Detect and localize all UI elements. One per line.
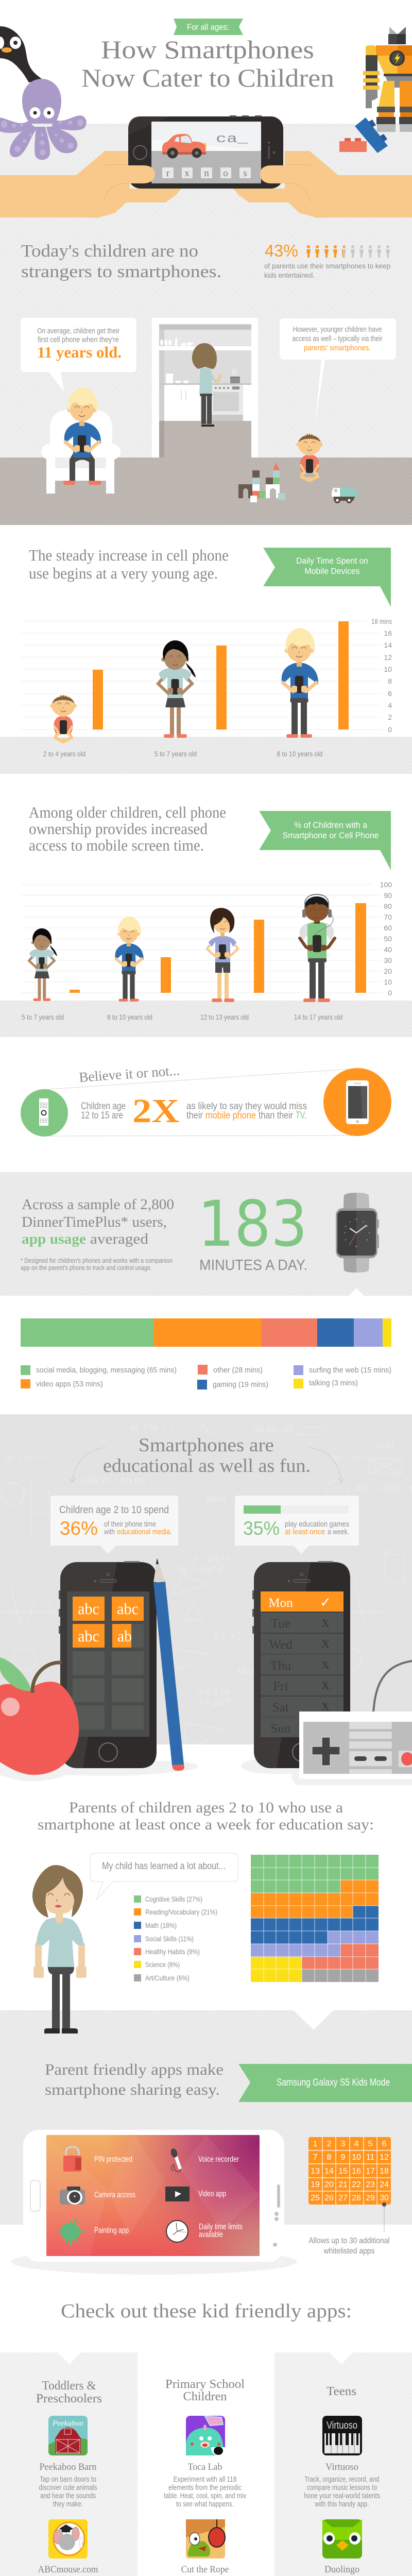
ribbon: daily time: Mobile Devices xyxy=(305,566,359,576)
letter tiles: abc xyxy=(78,1600,99,1618)
legend: learned skills: Healthy Habits (9%) xyxy=(145,1947,200,1956)
white notch under watch xyxy=(349,1288,364,1296)
ribbon: percent of children: % of Children with a xyxy=(294,820,368,830)
day list: Tue xyxy=(271,1617,290,1631)
feature labels: Painting app xyxy=(94,2226,129,2235)
app grid: 30 whitelisted apps: 14 xyxy=(324,2167,334,2176)
chalkboard formulas: S = π/2 xyxy=(214,1630,241,1640)
bar chart: phone ownership: 100 xyxy=(380,880,392,889)
legend: learned skills: Social Skills (11%) xyxy=(145,1935,194,1943)
background: hero dotted band xyxy=(0,124,412,460)
legend: learned skills: Science (8%) xyxy=(145,1960,180,1969)
heading: educational as well as fun: educational as well as fun. xyxy=(103,1455,311,1477)
icon: wall clock xyxy=(166,2221,188,2242)
speech bubble: parents' smartphones: However, younger children have xyxy=(293,326,382,334)
bar chart: daily time spent: 10 xyxy=(384,665,392,673)
app grid: 30 whitelisted apps: 25 xyxy=(311,2194,320,2202)
tween girl xyxy=(207,908,238,1002)
ribbon: percent of children xyxy=(259,811,391,870)
day list: Sun xyxy=(271,1722,291,1736)
letter tiles: abc xyxy=(78,1627,99,1645)
bar chart: phone ownership: 0 xyxy=(388,989,392,997)
callout: believe it or not: their xyxy=(186,1110,203,1121)
legend: app usage: other (28 mins) xyxy=(213,1366,263,1375)
panel: teens: with this handy app. xyxy=(315,2500,369,2509)
card: 35 percent: at least once xyxy=(285,1528,325,1536)
panel: toddlers and preschoolers: Toddlers & xyxy=(42,2379,96,2393)
stacked bar: app usage xyxy=(21,1318,391,1347)
speech bubble: my child has learned: My child has learned a lot about... xyxy=(102,1861,226,1872)
letter keys: s xyxy=(243,168,247,179)
card: 36 percent: with xyxy=(104,1528,115,1536)
callout: believe it or not: mobile phone xyxy=(205,1110,256,1121)
callout: believe it or not: as likely to say they would miss xyxy=(186,1101,307,1112)
toy blocks castle xyxy=(238,463,285,502)
background: chalkboard xyxy=(0,1414,412,1744)
icon: toca lab xyxy=(186,2416,225,2455)
speech bubble: first cell phone: On average, children get their xyxy=(37,327,119,335)
bar chart: daily time spent: 18 mins xyxy=(371,617,392,625)
app grid: 30 whitelisted apps: 29 xyxy=(366,2194,375,2202)
bar chart: daily time spent: 0 xyxy=(388,725,392,734)
app grid: 30 whitelisted apps: 13 xyxy=(311,2167,320,2176)
badge: for all ages xyxy=(174,19,243,35)
chalkboard formulas: π ≈ 3,14 xyxy=(198,1687,229,1697)
icon: virtuoso xyxy=(322,2416,362,2455)
bar chart: daily time spent: 6 xyxy=(388,689,392,698)
app grid: 30 whitelisted apps: 19 xyxy=(311,2180,320,2189)
letter keys xyxy=(162,167,251,179)
feature labels: Video app xyxy=(198,2190,226,2198)
heading: older children: ownership provides increased xyxy=(29,820,208,838)
day list: Fri xyxy=(273,1680,288,1693)
heading: parent friendly apps: Parent friendly apps make xyxy=(45,2060,224,2078)
bar chart: phone ownership: 30 xyxy=(384,956,392,964)
letter tiles: ab xyxy=(117,1627,132,1645)
bar chart: daily time spent: 16 xyxy=(384,629,392,637)
bar chart: daily time spent: 2 xyxy=(388,713,392,721)
speech bubble: parents' smartphones: parents' smartphones. xyxy=(304,344,371,352)
feature icons xyxy=(58,2147,190,2246)
word puzzle: ca_ xyxy=(216,132,249,146)
heading: steady increase: use begins at a very young age. xyxy=(29,564,218,582)
speech bubble: first cell phone xyxy=(21,318,136,393)
age labels xyxy=(43,750,322,758)
child figures xyxy=(50,628,318,742)
app screen xyxy=(151,122,261,183)
legend: learned skills: Reading/Vocabulary (21%) xyxy=(145,1908,217,1916)
panel: toddlers and preschoolers: and hear the sounds xyxy=(40,2492,96,2500)
stat: 43 percent of parents xyxy=(264,241,390,279)
band under chart 2 xyxy=(0,1001,412,1037)
arrow: dashed left xyxy=(70,1448,105,1482)
text: app usage averaged: app on the parent's phone to track and control usage. xyxy=(21,1264,152,1272)
day list: X xyxy=(321,1637,330,1650)
day list: Mon xyxy=(268,1596,293,1610)
band under chart 1 xyxy=(0,737,412,774)
legend: app usage: video apps (53 mins) xyxy=(36,1380,103,1388)
legend: app usage: gaming (19 mins) xyxy=(213,1380,268,1389)
stat: 43 percent of parents: of parents use their smartphones to keep xyxy=(264,262,390,270)
app screen xyxy=(46,2135,260,2256)
app grid: 30 whitelisted apps: 21 xyxy=(338,2180,348,2189)
heading: kid friendly apps: Check out these kid friendly apps: xyxy=(61,2300,352,2322)
app grid: 30 whitelisted apps: 4 xyxy=(354,2140,359,2148)
bar chart: daily time spent: 4 xyxy=(388,701,392,709)
callout: additional apps xyxy=(309,2202,389,2256)
speech bubble: my child has learned xyxy=(90,1853,238,1900)
app grid: 30 whitelisted apps: 30 xyxy=(380,2194,389,2202)
tablet: kids mode phone xyxy=(11,2130,297,2275)
panel: primary school children: elements from the periodic xyxy=(168,2484,242,2492)
stat: 43 percent of parents: 43% xyxy=(265,241,298,260)
chalkboard formulas: π ≈ 22/7 xyxy=(198,1697,230,1707)
panel: primary school children: Cut the Rope xyxy=(181,2564,229,2575)
day list: X xyxy=(321,1617,330,1630)
panel: toddlers and preschoolers xyxy=(0,2352,138,2576)
day list: X xyxy=(321,1700,330,1713)
feature labels: Voice recorder xyxy=(198,2155,239,2164)
bar chart: daily time spent: 14 xyxy=(384,641,392,649)
icon: apple xyxy=(0,1657,79,1775)
panel: primary school children: Primary School xyxy=(165,2378,245,2391)
figures by age xyxy=(29,894,335,1002)
icon: video player xyxy=(165,2187,190,2201)
age labels: 5 to 7 years old xyxy=(154,750,197,758)
bar chart: phone ownership: 80 xyxy=(384,902,392,910)
panel: teens: Virtuoso xyxy=(325,2462,358,2472)
baby with phone xyxy=(296,433,323,481)
panel: teens: Track, organize, record, and xyxy=(305,2476,379,2484)
icon: robot xyxy=(363,27,412,132)
day list: X xyxy=(321,1679,330,1692)
feature labels xyxy=(94,2155,243,2239)
text: app usage averaged: DinnerTimePlus* users, xyxy=(22,1214,167,1230)
age labels: 12 to 13 years old xyxy=(200,1013,249,1021)
ribbon: samsung kids mode: Samsung Galaxy S5 Kids Mode xyxy=(277,2077,390,2088)
ribbon: samsung kids mode xyxy=(238,2064,412,2102)
chalkboard formulas: AB BD AD xyxy=(252,1424,293,1434)
legend: app usage: talking (3 mins) xyxy=(309,1379,358,1387)
panel: primary school children: table. Heat, cool, spin, and mix xyxy=(164,2492,247,2500)
ribbon: daily time: Daily Time Spent on xyxy=(296,556,368,566)
icon: duolingo xyxy=(322,2519,362,2558)
stat: 183 minutes a day: MINUTES A DAY. xyxy=(199,1257,307,1274)
speech bubble: first cell phone: 11 years old. xyxy=(37,343,122,361)
app grid: 30 whitelisted apps xyxy=(308,2137,391,2205)
heading: older children: access to mobile screen time. xyxy=(29,836,204,854)
icon: camera xyxy=(60,2187,85,2205)
legend: learned skills: Math (18%) xyxy=(145,1921,177,1929)
app grid: 30 whitelisted apps: 1 xyxy=(313,2140,318,2148)
age labels: 14 to 17 years old xyxy=(294,1013,342,1021)
shadows on table xyxy=(0,1759,412,1785)
text: app usage averaged: averaged xyxy=(90,1231,149,1247)
icon: microphone xyxy=(170,2148,182,2172)
heading: parent friendly apps: smartphone sharing easy. xyxy=(45,2080,220,2098)
app grid: 30 whitelisted apps: 17 xyxy=(366,2167,375,2176)
icon: smartphone in orange circle xyxy=(323,1068,391,1136)
phone in hands xyxy=(128,115,283,189)
day list: ✓ xyxy=(320,1595,331,1610)
bar chart: daily time spent: 12 xyxy=(384,653,392,662)
heading: no strangers xyxy=(21,242,221,281)
people pictogram xyxy=(306,245,390,258)
icon: peekaboo barn: Peekaboo xyxy=(52,2419,84,2428)
letter keys: r xyxy=(166,168,170,179)
day list: Sat xyxy=(272,1701,289,1715)
panel: toddlers and preschoolers: Tap on barn doors to xyxy=(40,2476,96,2484)
bar chart: phone ownership: 10 xyxy=(384,978,392,986)
letter keys: o xyxy=(223,168,228,179)
card: 36 percent: educational media. xyxy=(117,1528,172,1536)
letter tiles xyxy=(73,1597,144,1648)
title: Now Cater to Children xyxy=(81,63,334,92)
chalkboard formulas xyxy=(0,1414,412,1744)
panel: teens: Duolingo xyxy=(324,2564,359,2575)
seated boy xyxy=(63,387,101,485)
panel: primary school children xyxy=(164,2378,247,2576)
app grid: 30 whitelisted apps: 8 xyxy=(327,2153,332,2162)
app grid: 30 whitelisted apps: 27 xyxy=(338,2194,348,2202)
icon: hands holding phone xyxy=(0,115,412,218)
text: app usage averaged xyxy=(21,1196,174,1272)
ribbon: percent of children: Smartphone or Cell Phone xyxy=(282,831,379,840)
feature labels: Daily time limits xyxy=(199,2223,243,2231)
app grid: 30 whitelisted apps: 5 xyxy=(368,2140,373,2148)
bar chart: daily time spent: 8 xyxy=(388,677,392,685)
app grid: 30 whitelisted apps: 2 xyxy=(327,2140,332,2148)
icon: paint splat xyxy=(58,2218,84,2246)
white band below tablet xyxy=(0,2225,412,2352)
icon: cut the rope xyxy=(186,2519,225,2558)
callout: believe it or not xyxy=(21,1062,391,1137)
heading: educational as well as fun: Smartphones are xyxy=(139,1435,274,1456)
heading: parents say: Parents of children ages 2 to 10 who use a xyxy=(69,1799,343,1816)
panel: teens: Teens xyxy=(327,2385,356,2398)
callout: believe it or not: than their xyxy=(259,1110,294,1121)
day list: Thu xyxy=(270,1659,291,1673)
letter keys: x xyxy=(184,168,190,179)
arrow: dashed right xyxy=(309,1448,345,1483)
app grid: 30 whitelisted apps: 15 xyxy=(338,2167,348,2176)
heading: educational as well as fun xyxy=(103,1435,311,1477)
toy truck xyxy=(332,486,357,503)
age labels: 8 to 10 years old xyxy=(277,750,322,758)
bar chart: phone ownership: 90 xyxy=(384,891,392,900)
icon: game controller xyxy=(299,1661,412,1779)
heading: no strangers: Today's children are no xyxy=(21,242,198,261)
waffle chart xyxy=(251,1855,379,1982)
panel: toddlers and preschoolers: ABCmouse.com xyxy=(38,2564,98,2575)
card: 36 percent: of their phone time xyxy=(104,1520,156,1529)
chalkboard formulas: [a,b] xyxy=(376,1439,395,1450)
legend: learned skills xyxy=(134,1895,217,1982)
card: 35 percent xyxy=(235,1496,359,1554)
panel: primary school children: Toca Lab xyxy=(187,2462,222,2472)
panel: teens xyxy=(274,2352,412,2576)
callout: believe it or not: 2X xyxy=(132,1092,179,1130)
day list xyxy=(268,1595,331,1736)
icon: pencil xyxy=(153,1558,184,1771)
kitchen doorway with mother xyxy=(152,318,258,460)
stat: 183 minutes a day: 183 xyxy=(198,1188,307,1261)
icon: abcmouse xyxy=(48,2519,88,2558)
ribbon: daily time xyxy=(263,548,391,607)
heading: older children: Among older children, cell phone xyxy=(29,803,226,821)
bar chart: daily time spent xyxy=(21,617,392,758)
icon: smartwatch xyxy=(336,1193,379,1273)
card: 35 percent: play education games xyxy=(285,1520,349,1529)
text: app usage averaged: app usage xyxy=(22,1231,86,1247)
band: parent friendly apps xyxy=(0,2010,412,2225)
card: 36 percent: 36% xyxy=(60,1518,98,1539)
letter keys: n xyxy=(204,168,209,179)
stat: 43 percent of parents: kids entertained. xyxy=(264,271,315,279)
legend: app usage: social media, blogging, messaging (65 mins) xyxy=(36,1366,177,1375)
age labels: 2 to 4 years old xyxy=(43,750,85,758)
feature labels: available xyxy=(199,2230,223,2239)
app grid: 30 whitelisted apps: 24 xyxy=(380,2180,389,2189)
panel: primary school children: Children xyxy=(183,2390,227,2403)
armchair with older boy xyxy=(41,387,121,494)
panel: teens: hone your real-world talents xyxy=(304,2492,380,2500)
callout: believe it or not: TV. xyxy=(296,1110,306,1121)
heading: steady increase xyxy=(29,546,229,582)
band: app usage xyxy=(0,1172,412,1296)
feature labels: Camera access xyxy=(94,2191,135,2199)
chalkboard formulas: ax + by = c xyxy=(5,1452,48,1463)
heading: steady increase: The steady increase in cell phone xyxy=(29,546,229,564)
chalkboard formulas: y = 1/1+x xyxy=(192,1553,230,1563)
app grid: 30 whitelisted apps: 10 xyxy=(352,2153,361,2162)
callout: additional apps: Allows up to 30 additional xyxy=(309,2236,389,2245)
chalkboard formulas: ax + by = c xyxy=(130,1421,174,1432)
age labels xyxy=(22,1013,342,1021)
callout: believe it or not: Children age xyxy=(81,1101,126,1112)
app grid: 30 whitelisted apps: 7 xyxy=(313,2153,318,2162)
phone: weekly schedule xyxy=(252,1561,350,1768)
chalkboard formulas: SABCD = AD BB xyxy=(80,1476,145,1486)
badge: for all ages: For all ages: xyxy=(187,22,229,32)
panel: toddlers and preschoolers: discover cute animals xyxy=(39,2484,97,2492)
phone: letters app xyxy=(59,1561,157,1768)
icon: octopus xyxy=(0,79,87,160)
speech bubble: parents' smartphones xyxy=(280,318,396,423)
bar chart: phone ownership: 40 xyxy=(384,945,392,954)
icon: virtuoso: Virtuoso xyxy=(327,2420,357,2431)
notch pointer xyxy=(294,2010,333,2030)
panel: toddlers and preschoolers: Preschoolers xyxy=(36,2392,102,2405)
car xyxy=(162,134,207,159)
teen with headphones xyxy=(300,894,335,1002)
callout: believe it or not: 12 to 15 are xyxy=(81,1110,123,1121)
legend: learned skills: Cognitive Skills (27%) xyxy=(145,1895,202,1903)
day list: X xyxy=(321,1658,330,1671)
app grid: 30 whitelisted apps: 22 xyxy=(352,2180,361,2189)
app grid: 30 whitelisted apps: 9 xyxy=(341,2153,346,2162)
app grid: 30 whitelisted apps: 26 xyxy=(324,2194,334,2202)
floor xyxy=(0,457,412,525)
mother xyxy=(192,343,221,427)
bar chart: phone ownership xyxy=(21,880,392,1021)
title: How Smartphones xyxy=(101,35,314,64)
callout: additional apps: whitelisted apps xyxy=(323,2247,375,2256)
letter tiles: abc xyxy=(117,1600,139,1618)
app grid: 30 whitelisted apps: 20 xyxy=(324,2180,334,2189)
legend: app usage: surfing the web (15 mins) xyxy=(309,1366,391,1375)
chalkboard formulas: Math xyxy=(236,1666,256,1676)
feature labels: PIN protected xyxy=(94,2155,132,2164)
app grid: 30 whitelisted apps: 23 xyxy=(366,2180,375,2189)
bar chart: phone ownership: 60 xyxy=(384,924,392,932)
legend: app usage xyxy=(21,1365,391,1389)
card: 36 percent: Children age 2 to 10 spend xyxy=(59,1504,169,1516)
age labels: 5 to 7 years old xyxy=(22,1013,64,1021)
panel: toddlers and preschoolers: Peekaboo Barn xyxy=(39,2462,97,2472)
heading: parents say: smartphone at least once a week for education say: xyxy=(38,1816,374,1833)
title xyxy=(81,35,334,92)
panel: teens: compare music lessons to xyxy=(307,2484,377,2492)
app grid: 30 whitelisted apps: 12 xyxy=(380,2153,389,2162)
heading: older children xyxy=(29,803,226,854)
app grid: 30 whitelisted apps: 18 xyxy=(380,2167,389,2176)
chalkboard formulas: ax + by = c xyxy=(332,1452,375,1463)
card: 35 percent: 35% xyxy=(243,1518,280,1539)
app grid: 30 whitelisted apps: 3 xyxy=(341,2140,346,2148)
callout: believe it or not: Believe it or not... xyxy=(78,1062,180,1085)
bar chart: phone ownership: 70 xyxy=(384,913,392,921)
heading: parents say xyxy=(38,1799,374,1833)
figure: mother xyxy=(32,1865,87,2033)
app grid: 30 whitelisted apps: 6 xyxy=(382,2140,387,2148)
chalkboard formulas: Math xyxy=(205,1494,226,1504)
app grid: 30 whitelisted apps: 16 xyxy=(352,2167,361,2176)
bar chart: phone ownership: 20 xyxy=(384,967,392,975)
icon: building bricks xyxy=(339,117,388,153)
speech bubble: parents' smartphones: access as well – typically via their xyxy=(293,335,383,343)
icon: padlock xyxy=(63,2147,81,2172)
app grid: 30 whitelisted apps: 28 xyxy=(352,2194,361,2202)
legend: learned skills: Art/Culture (6%) xyxy=(145,1974,190,1982)
text: app usage averaged: Across a sample of 2,800 xyxy=(22,1196,174,1213)
speech bubble: first cell phone: first cell phone when they're xyxy=(38,336,119,344)
icon: tv remote xyxy=(21,1089,68,1137)
card: 35 percent: a week. xyxy=(328,1528,349,1536)
icon: peekaboo barn xyxy=(48,2416,88,2455)
day list: Wed xyxy=(269,1638,293,1652)
panel: primary school children: to see what happens. xyxy=(176,2500,234,2509)
bar chart: phone ownership: 50 xyxy=(384,935,392,943)
card: 36 percent xyxy=(50,1496,178,1554)
panel: toddlers and preschoolers: they make. xyxy=(53,2500,83,2509)
heading: parent friendly apps xyxy=(45,2060,224,2098)
heading: no strangers: strangers to smartphones. xyxy=(21,262,221,281)
chalkboard formulas: 3tg d - ctg³ d xyxy=(175,1563,223,1573)
icon: penguin xyxy=(0,26,43,82)
app grid: 30 whitelisted apps: 11 xyxy=(366,2153,374,2162)
panel: primary school children: Experiment with all 118 xyxy=(173,2476,237,2484)
age labels: 8 to 10 years old xyxy=(107,1013,152,1021)
text: app usage averaged: * Designed for children's phones and works with a companion xyxy=(21,1257,173,1264)
